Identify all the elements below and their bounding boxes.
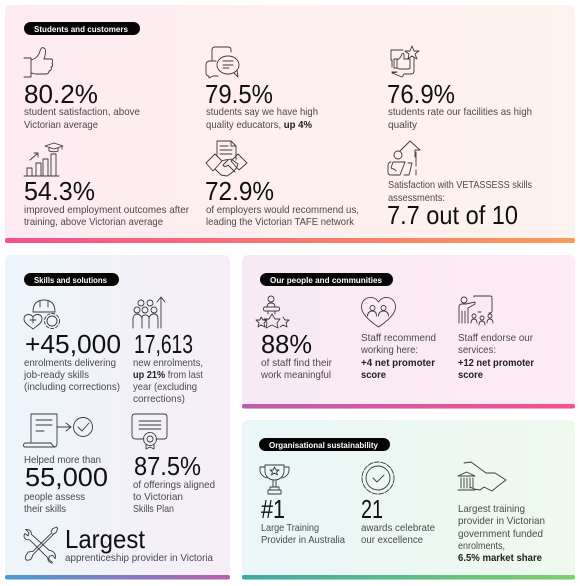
stat: #1: Provider in Australia [261, 535, 345, 546]
stat: 7.7 out of 10: 7.7 out of 10 [387, 200, 518, 230]
stat: 55,000 [24, 455, 108, 515]
stat: #1 [261, 494, 345, 546]
stat: 7.7 out of 10: assessments: [388, 193, 445, 204]
stat: 54.3%: 54.3% [24, 176, 95, 206]
stat: 79.5%: 79.5% [205, 79, 273, 109]
stat: largest training provider: Largest training [458, 504, 525, 515]
stat: 72.9%: 72.9% [205, 176, 274, 206]
stat: 79.5%: students say we have high [206, 107, 318, 118]
stat: 88%: work meaningful [260, 370, 331, 381]
heading: our people and communities: Our people and communities [270, 275, 382, 285]
stat: 17,613: corrections) [133, 394, 185, 405]
stat: 87.5% [133, 451, 215, 515]
icon: speaker with stars [256, 296, 289, 328]
stat: 88%: 88% [261, 329, 312, 359]
stat: 87.5%: 87.5% [134, 451, 201, 481]
stat: +45,000: enrolments delivering [24, 358, 116, 369]
stat: 79.5% [205, 79, 318, 131]
icon: institution on Victoria map [458, 462, 506, 491]
stat: 21: our excellence [361, 535, 423, 546]
stat: 76.9%: students rate our facilities as high [388, 107, 532, 118]
icon: bar chart with graduation cap [24, 143, 63, 176]
stat: 21: awards celebrate [361, 523, 435, 534]
stat: largest training provider: 6.5% market share [458, 553, 542, 564]
icon: document arrow and tick [24, 414, 92, 447]
stat: staff endorse [458, 333, 534, 381]
icon: person with upward arrow [388, 141, 420, 175]
panel: organisational sustainability [242, 420, 575, 580]
stat: staff recommend: working here: [360, 345, 418, 356]
stat: #1: Large Training [261, 523, 319, 534]
stat: staff recommend [360, 333, 436, 381]
icon: thumbs up [24, 48, 53, 77]
stat: 87.5%: of offerings aligned [133, 480, 215, 491]
stat: staff endorse: score [458, 370, 483, 381]
stat: largest training provider [458, 504, 545, 564]
stat: 88% [260, 329, 333, 381]
stat: 54.3%: improved employment outcomes after [24, 205, 190, 216]
stat: largest apprenticeship provider: apprenticeship provider in Victoria [65, 553, 213, 564]
stat: 17,613 [133, 329, 203, 405]
stat: 54.3%: training, above Victorian average [24, 217, 163, 228]
panel: skills and solutions [5, 255, 230, 580]
stat: 55,000: their skills [24, 504, 66, 515]
stat: 76.9% [387, 79, 532, 131]
stat: 80.2% [24, 79, 140, 131]
stat: 55,000: people assess [24, 492, 85, 503]
stat: 87.5%: Skills Plan [133, 504, 174, 515]
panel: our people and communities [242, 255, 575, 409]
heading: students and customers [24, 22, 140, 35]
stat: 88%: of staff find their [261, 358, 333, 369]
stat: staff recommend: +4 net promoter [361, 358, 435, 369]
stat: staff recommend: Staff recommend [361, 333, 436, 344]
heading: students and customers: Students and customers [34, 24, 128, 34]
stat: 76.9%: 76.9% [387, 79, 455, 109]
stat: 7.7 out of 10: Satisfaction with VETASSESS skills [388, 180, 532, 191]
stat: 72.9%: leading the Victorian TAFE network [206, 217, 355, 228]
stat: largest training provider: provider in Victorian [458, 516, 545, 527]
stat: staff endorse: +12 net promoter [458, 358, 534, 369]
icon: award seal with tick [362, 462, 394, 494]
stat: largest apprenticeship provider [65, 524, 213, 564]
stat: 54.3% [24, 176, 190, 228]
stat: 76.9%: quality [388, 120, 418, 131]
icon: heart with people [362, 297, 396, 327]
stat: 79.5%: quality educators, up 4% [206, 120, 312, 131]
stat: 17,613: up 21% from last [133, 370, 203, 381]
stat: 80.2%: Victorian average [24, 120, 98, 131]
heading: skills and solutions [24, 273, 119, 286]
stat: 80.2%: 80.2% [24, 79, 98, 109]
stat: #1: #1 [261, 494, 285, 524]
stat: 21: 21 [361, 494, 383, 524]
stat: staff endorse: Staff endorse our [458, 333, 534, 344]
stat: largest training provider: enrolments, [458, 541, 505, 552]
stat: 7.7 out of 10 [387, 180, 532, 230]
stat: 72.9%: of employers would recommend us, [206, 205, 359, 216]
icon: people with upward arrow [133, 297, 165, 328]
stat: +45,000: +45,000 [25, 329, 121, 359]
stat: 80.2%: student satisfaction, above [24, 107, 140, 118]
stat: +45,000: job-ready skills [23, 370, 89, 381]
stat: largest training provider: government funded [458, 529, 543, 540]
icon: hard hat, heart and gear [24, 300, 60, 329]
icon: presenter at board [459, 296, 493, 325]
stat: staff endorse: services: [458, 345, 496, 356]
icon: trophy [260, 465, 289, 494]
stat: +45,000 [23, 329, 121, 393]
icon: handshake with document [206, 141, 247, 176]
heading: skills and solutions: Skills and solutions [34, 275, 107, 285]
icon: rating thumbs up with star [391, 46, 419, 77]
stat: staff recommend: score [361, 370, 386, 381]
stat: 17,613: year (excluding [133, 382, 197, 393]
icon: certificate [132, 414, 167, 449]
stat: 72.9% [205, 176, 359, 228]
heading: organisational sustainability: Organisational sustainability [269, 440, 378, 450]
stat: 55,000: Helped more than [24, 455, 101, 466]
stat: 21 [361, 494, 435, 546]
stat: 55,000: 55,000 [25, 462, 108, 492]
heading: our people and communities [260, 273, 393, 286]
icon: crossed wrench and screwdriver [24, 527, 58, 563]
heading: organisational sustainability [259, 438, 390, 451]
icon: speech bubbles [206, 47, 239, 78]
stat: 87.5%: to Victorian [133, 492, 183, 503]
stat: 17,613: new enrolments, [133, 358, 203, 369]
panel: students and customers [5, 5, 575, 243]
stat: largest apprenticeship provider: Largest [65, 524, 146, 554]
stat: +45,000: (including corrections) [24, 382, 120, 393]
stat: 17,613: 17,613 [134, 329, 193, 359]
